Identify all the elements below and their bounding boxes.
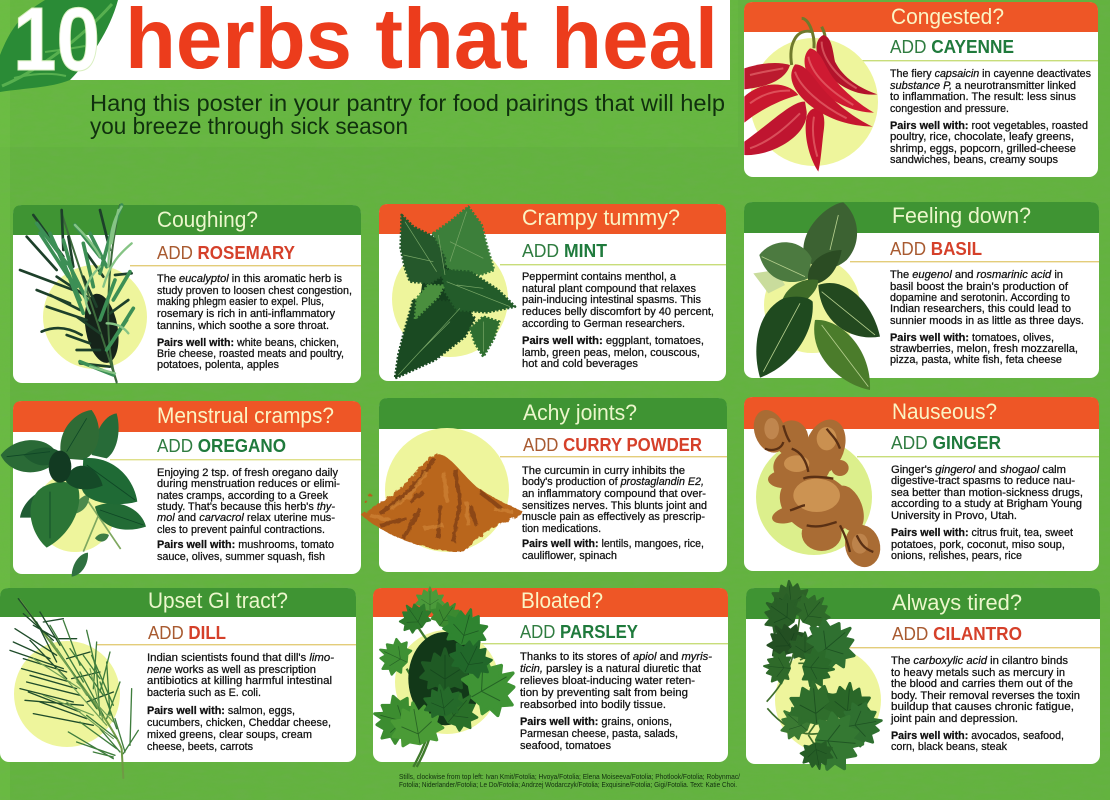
body text: reduces belly discomfort by 40 percent, [522, 306, 714, 318]
body text: Indian researchers, this could lead to [890, 303, 1071, 315]
yellow circle [395, 630, 499, 734]
body text: study proven to loosen chest congestion, [157, 285, 352, 297]
body text: study. That's because this herb's thy- [157, 501, 335, 513]
pairings: sauce, olives, summer squash, fish [157, 551, 325, 563]
title: Achy joints? [523, 400, 637, 425]
yellow circle [750, 38, 878, 166]
yellow circle [775, 647, 881, 753]
body text: buildup that causes chronic fatigue, [891, 701, 1074, 713]
title: Menstrual cramps? [157, 403, 334, 428]
body text: Thanks to its stores of apiol and myris- [520, 651, 712, 663]
pairings [147, 705, 331, 753]
body text: Enjoying 2 tsp. of fresh oregano daily [157, 467, 339, 479]
pairings: seafood, tomatoes [520, 740, 612, 752]
body text: congestion and pressure. [890, 103, 1009, 115]
body text: tion medications. [522, 523, 601, 535]
body text: during menstruation reduces or elimi- [157, 478, 340, 490]
pairings: sandwiches, beans, creamy soups [890, 154, 1059, 166]
title: Nauseous? [892, 399, 997, 424]
body text: the blood and carries them out of the [891, 678, 1073, 690]
body text: The carboxylic acid in cilantro binds [891, 655, 1069, 667]
icon: dill frond [10, 599, 138, 778]
body text [520, 651, 712, 711]
body text: body. Their removal reverses the toxin [891, 690, 1080, 702]
body text [147, 652, 334, 699]
body text [890, 655, 1080, 725]
pairings: mixed greens, clear soups, cream [147, 729, 312, 741]
pairings: Pairs well with: avocados, seafood, [891, 730, 1064, 742]
title: Always tired? [892, 590, 1022, 615]
icon: green leaf [0, 0, 118, 92]
panel: upset GI tract / dill [0, 588, 356, 778]
pairings [522, 538, 704, 562]
body text: The eugenol and rosmarinic acid in [890, 269, 1063, 281]
pairings: Pairs well with: citrus fruit, tea, sweet [891, 527, 1073, 539]
body text [890, 68, 1092, 115]
pairings: shrimp, eggs, popcorn, grilled-cheese [890, 143, 1076, 155]
header band [373, 588, 728, 617]
header band [13, 205, 361, 235]
title: Feeling down? [892, 203, 1031, 228]
photo credits [399, 774, 740, 789]
pairings [891, 730, 1064, 753]
title: Congested? [891, 4, 1004, 29]
body text: sunnier moods in as little as three days. [890, 315, 1084, 327]
pairings [520, 716, 678, 752]
panel: always tired / cilantro [746, 579, 1100, 772]
pairings: Pairs well with: grains, onions, [520, 716, 672, 728]
header band [744, 2, 1098, 32]
body text: an inflammatory compound that over- [522, 488, 706, 500]
body text: Ginger's gingerol and shogaol calm [891, 464, 1066, 476]
yellow circle [392, 241, 508, 357]
pairings: Pairs well with: root vegetables, roasted [890, 120, 1088, 132]
body text: body's production of prostaglandin E2, [522, 476, 704, 488]
pairings [890, 332, 1078, 366]
pairings: Parmesan cheese, pasta, salads, [520, 728, 678, 740]
body text: making phlegm easier to expel. Plus, [157, 296, 324, 308]
pairings: potatoes, pork, coconut, miso soup, [891, 539, 1065, 551]
yellow circle [35, 472, 115, 552]
photo credits: Fotolia; Niderlander/Fotolia; Le Do/Fotolia; Andrzej Wodarczyk/Fotolia; Exquisine/Fotolia; Gigi/Fotolia. Text: Katie Choi. [399, 782, 737, 789]
herb heading: ADD BASIL [890, 239, 982, 259]
icon: cayenne peppers [744, 18, 877, 172]
body text: The eucalyptol in this aromatic herb is [157, 273, 343, 285]
body text: natural plant compound that relaxes [522, 283, 697, 295]
pairings: hot and cold beverages [522, 358, 639, 370]
panel: nauseous / ginger [744, 397, 1099, 571]
body text: basil boost the brain's production of [890, 281, 1069, 293]
body text: antibiotics at killing harmful intestinal [147, 675, 332, 687]
body text: to heavy metals such as mercury in [891, 667, 1065, 679]
body text: sensitizes nerves. This blunts joint and [522, 500, 707, 512]
icon: parsley sprig [369, 587, 527, 767]
herb heading: ADD CURRY POWDER [523, 435, 702, 455]
yellow circle [385, 428, 509, 552]
body text: digestive-tract spasms to reduce nau- [891, 475, 1075, 487]
body text: ticin, parsley is a natural diuretic that [520, 663, 701, 675]
pairings: Brie cheese, roasted meats and poultry, [157, 348, 344, 360]
title: Crampy tummy? [522, 205, 680, 230]
pairings: Pairs well with: white beans, chicken, [157, 337, 339, 349]
header band [744, 202, 1099, 233]
body text: relieves bloat-inducing water reten- [520, 675, 695, 687]
icon: cilantro sprigs [756, 579, 885, 772]
yellow circle [43, 265, 147, 369]
pairings: onions, relishes, pears, rice [891, 550, 1022, 562]
body text: Indian scientists found that dill's limo- [147, 652, 334, 664]
pairings: potatoes, polenta, apples [157, 359, 280, 371]
body text: dopamine and serotonin. According to [890, 292, 1070, 304]
body text: tion by preventing salt from being [520, 687, 688, 699]
yellow circle [756, 439, 872, 555]
body text: The fiery capsaicin in cayenne deactivates [890, 68, 1092, 80]
body text [157, 467, 340, 536]
body text: pain-inducing intestinal spasms. This [522, 294, 702, 306]
body text [522, 271, 714, 330]
herb heading: ADD ROSEMARY [157, 243, 295, 263]
panel: achy joints / curry powder [362, 398, 727, 572]
pairings: Pairs well with: salmon, eggs, [147, 705, 295, 717]
pairings [157, 539, 334, 563]
body text: cles to prevent painful contractions. [157, 524, 325, 536]
body text: nene works as well as prescription [147, 664, 316, 676]
pairings: cheese, beets, carrots [147, 741, 254, 753]
pairings [890, 120, 1088, 166]
header band [746, 588, 1100, 619]
header band [379, 204, 726, 234]
body text: joint pain and depression. [890, 713, 1018, 725]
title: Upset GI tract? [148, 588, 288, 613]
pairings: Pairs well with: mushrooms, tomato [157, 539, 334, 551]
panel: crampy tummy / mint [379, 204, 726, 381]
body text: nates cramps, according to a Greek [157, 490, 329, 502]
panel: menstrual cramps / oregano [1, 401, 361, 577]
icon: mint leaves [395, 207, 515, 378]
body text: according to a study at Brigham Young [891, 498, 1082, 510]
header band [13, 401, 361, 432]
herb heading: ADD PARSLEY [520, 622, 638, 642]
herb heading: ADD MINT [522, 241, 607, 261]
body text [890, 269, 1084, 327]
yellow circle [14, 641, 120, 747]
icon: curry powder pile [362, 454, 523, 553]
icon: rosemary sprig [20, 205, 133, 383]
herb heading: ADD GINGER [891, 433, 1001, 453]
body text: reabsorbed into bodily tissue. [520, 699, 666, 711]
body text: The curcumin in curry inhibits the [522, 465, 685, 477]
panel: coughing / rosemary [13, 205, 361, 383]
white title band [56, 0, 730, 80]
body text: tannins, which soothe a sore throat. [157, 320, 329, 332]
panel: bloated / parsley [369, 587, 728, 767]
body text: bacteria such as E. coli. [147, 687, 261, 699]
subtitle: you breeze through sick season [90, 113, 408, 139]
subtitle [90, 90, 725, 139]
subtitle: Hang this poster in your pantry for food pairings that will help [90, 90, 725, 116]
pairings: cucumbers, chicken, Cheddar cheese, [147, 717, 331, 729]
pairings [522, 335, 704, 370]
panel: congested / cayenne [744, 2, 1098, 177]
panel: feeling down / basil [744, 202, 1099, 390]
body text: according to German researchers. [522, 318, 685, 330]
photo credits: Stills, clockwise from top left: Ivan Kmit/Fotolia; Hvoya/Fotolia; Elena Moiseeva/Fotolia; Photlook/Fotolia; Robynmac/ [399, 774, 740, 781]
title: Bloated? [521, 588, 603, 613]
body text: muscle pain as effectively as prescrip- [522, 511, 705, 523]
pairings: cauliflower, spinach [522, 550, 617, 562]
body text [522, 465, 707, 535]
herb heading: ADD CAYENNE [890, 37, 1014, 57]
yellow circle [764, 257, 860, 353]
body text: University in Provo, Utah. [891, 510, 1017, 522]
herb heading: ADD DILL [148, 623, 226, 643]
icon: ginger root [748, 405, 885, 571]
pairings: strawberries, melon, fresh mozzarella, [890, 343, 1078, 355]
body text: substance P, a neurotransmitter linked [890, 80, 1076, 92]
header band [744, 397, 1099, 429]
header band [379, 398, 727, 429]
body text: sea better than motion-sickness drugs, [891, 487, 1083, 499]
pairings: Pairs well with: eggplant, tomatoes, [522, 335, 704, 347]
pairings: corn, black beans, steak [891, 741, 1008, 753]
body text: mol and carvacrol relax uterine mus- [157, 512, 335, 524]
body text: to inflammation. The result: less sinus [890, 91, 1077, 103]
herb heading: ADD CILANTRO [892, 624, 1022, 644]
pairings: pizza, pasta, white fish, feta cheese [890, 354, 1062, 366]
header band [0, 588, 356, 617]
icon: basil leaves [753, 202, 880, 390]
pairings: poultry, rice, chocolate, leafy greens, [890, 131, 1074, 143]
pairings [157, 337, 344, 371]
body text: Peppermint contains menthol, a [522, 271, 676, 283]
herb heading: ADD OREGANO [157, 436, 286, 456]
pairings: Pairs well with: lentils, mangoes, rice, [522, 538, 704, 550]
pairings: lamb, green peas, melon, couscous, [522, 347, 700, 359]
pairings: Pairs well with: tomatoes, olives, [890, 332, 1054, 344]
pairings [891, 527, 1073, 562]
title: Coughing? [157, 207, 258, 232]
body text [891, 464, 1083, 522]
header banner [0, 0, 730, 139]
icon: oregano leaves [1, 410, 146, 577]
body text: rosemary is rich in anti-inflammatory [157, 308, 336, 320]
body text [157, 273, 352, 332]
